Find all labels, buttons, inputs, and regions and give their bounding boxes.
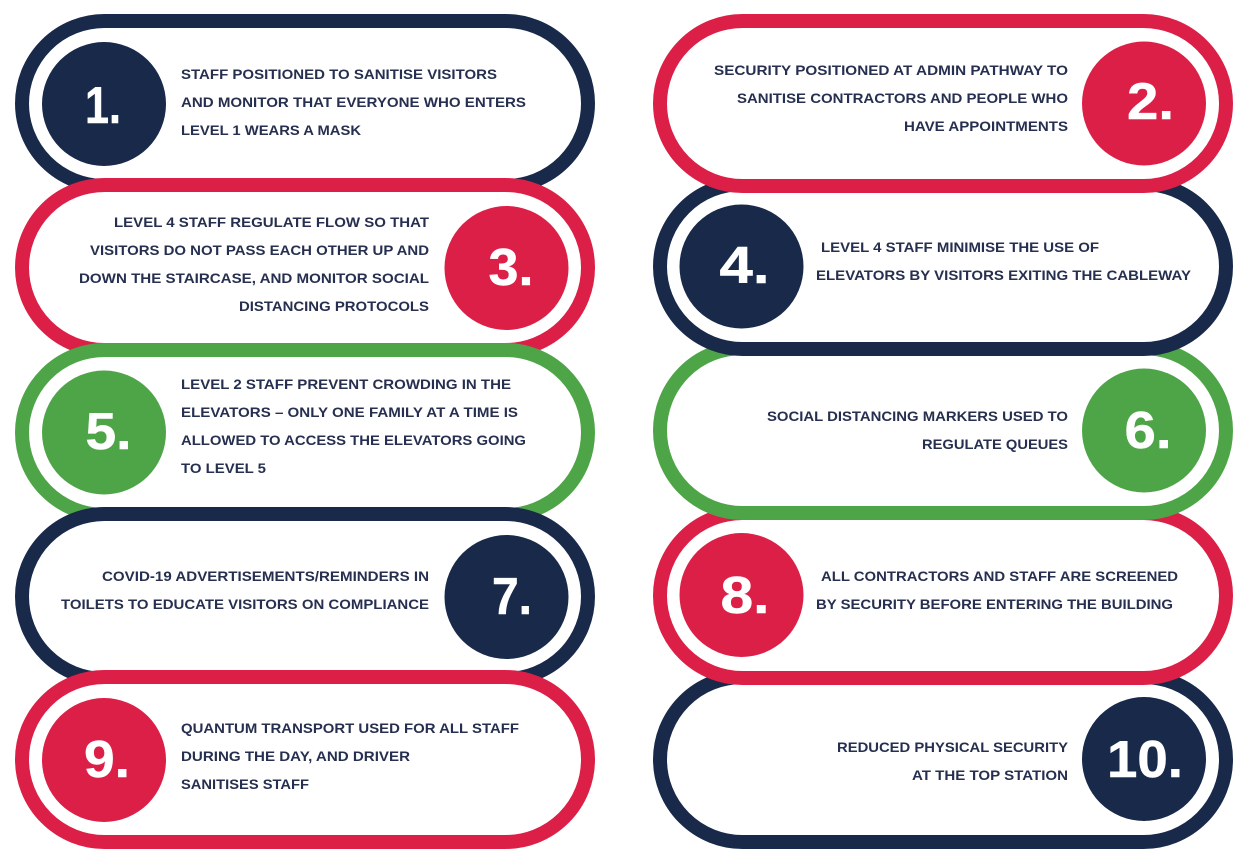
text 3: VISITORS DO NOT PASS EACH OTHER UP AND xyxy=(90,242,429,258)
text 8 xyxy=(816,568,1178,612)
pill 6: social distancing markers xyxy=(660,348,1226,513)
pill 8: contractors screened xyxy=(660,513,1226,678)
text 1 xyxy=(181,66,526,138)
text 2: HAVE APPOINTMENTS xyxy=(904,118,1068,134)
text 5: ELEVATORS – ONLY ONE FAMILY AT A TIME IS xyxy=(181,404,518,420)
text 2 xyxy=(714,62,1068,134)
badge 6 xyxy=(1082,368,1206,492)
badge 5: 5. xyxy=(86,403,132,461)
badge 9 xyxy=(42,698,166,822)
text 10: AT THE TOP STATION xyxy=(912,767,1068,783)
pill 3: regulate staircase flow xyxy=(22,185,588,350)
badge 8 xyxy=(680,533,804,657)
text 2: SECURITY POSITIONED AT ADMIN PATHWAY TO xyxy=(714,62,1068,78)
badge 4: 4. xyxy=(720,237,770,295)
badge 10 xyxy=(1082,697,1206,821)
badge 1 xyxy=(42,42,166,166)
pill 5: prevent elevator crowding xyxy=(22,350,588,515)
badge 8: 8. xyxy=(720,567,770,625)
text 3 xyxy=(79,214,429,314)
badge 7 xyxy=(444,535,568,659)
badge 2 xyxy=(1082,42,1206,166)
badge 7: 7. xyxy=(492,568,532,626)
text 7: COVID-19 ADVERTISEMENTS/REMINDERS IN xyxy=(102,568,429,584)
text 3: DISTANCING PROTOCOLS xyxy=(239,298,429,314)
text 1: LEVEL 1 WEARS A MASK xyxy=(181,122,361,138)
text 6: SOCIAL DISTANCING MARKERS USED TO xyxy=(767,408,1068,424)
text 3: LEVEL 4 STAFF REGULATE FLOW SO THAT xyxy=(114,214,429,230)
pill 10: reduced physical security xyxy=(660,677,1226,842)
text 5 xyxy=(181,376,526,476)
pill 7: advertisements in toilets xyxy=(22,514,588,679)
pill 9: quantum transport xyxy=(22,677,588,842)
text 4: LEVEL 4 STAFF MINIMISE THE USE OF xyxy=(821,239,1099,255)
text 8: BY SECURITY BEFORE ENTERING THE BUILDING xyxy=(816,596,1173,612)
text 8: ALL CONTRACTORS AND STAFF ARE SCREENED xyxy=(821,568,1178,584)
badge 10: 10. xyxy=(1107,731,1183,789)
text 4 xyxy=(816,239,1192,283)
text 7 xyxy=(61,568,429,612)
badge 2: 2. xyxy=(1127,73,1174,131)
text 6: REGULATE QUEUES xyxy=(922,436,1068,452)
text 9: DURING THE DAY, AND DRIVER xyxy=(181,748,410,764)
pill 1: staff sanitise visitors xyxy=(22,21,588,186)
text 2: SANITISE CONTRACTORS AND PEOPLE WHO xyxy=(737,90,1068,106)
text 5: TO LEVEL 5 xyxy=(181,460,266,476)
text 1: STAFF POSITIONED TO SANITISE VISITORS xyxy=(181,66,497,82)
text 6 xyxy=(767,408,1068,452)
text 9: QUANTUM TRANSPORT USED FOR ALL STAFF xyxy=(181,720,519,736)
text 10 xyxy=(837,739,1069,783)
text 10: REDUCED PHYSICAL SECURITY xyxy=(837,739,1069,755)
badge 3 xyxy=(444,206,568,330)
badge 1: 1. xyxy=(85,77,121,135)
text 7: TOILETS TO EDUCATE VISITORS ON COMPLIANCE xyxy=(61,596,429,612)
text 5: ALLOWED TO ACCESS THE ELEVATORS GOING xyxy=(181,432,526,448)
badge 4 xyxy=(680,204,804,328)
text 3: DOWN THE STAIRCASE, AND MONITOR SOCIAL xyxy=(79,270,429,286)
badge 9: 9. xyxy=(84,731,130,789)
badge 3: 3. xyxy=(488,239,534,297)
badge 6: 6. xyxy=(1124,402,1172,460)
text 4: ELEVATORS BY VISITORS EXITING THE CABLEWAY xyxy=(816,267,1192,283)
text 5: LEVEL 2 STAFF PREVENT CROWDING IN THE xyxy=(181,376,511,392)
text 9: SANITISES STAFF xyxy=(181,776,309,792)
text 1: AND MONITOR THAT EVERYONE WHO ENTERS xyxy=(181,94,526,110)
text 9 xyxy=(181,720,519,792)
pill 2: security at admin pathway xyxy=(660,21,1226,186)
pill 4: minimise elevator use xyxy=(660,184,1226,349)
badge 5 xyxy=(42,370,166,494)
